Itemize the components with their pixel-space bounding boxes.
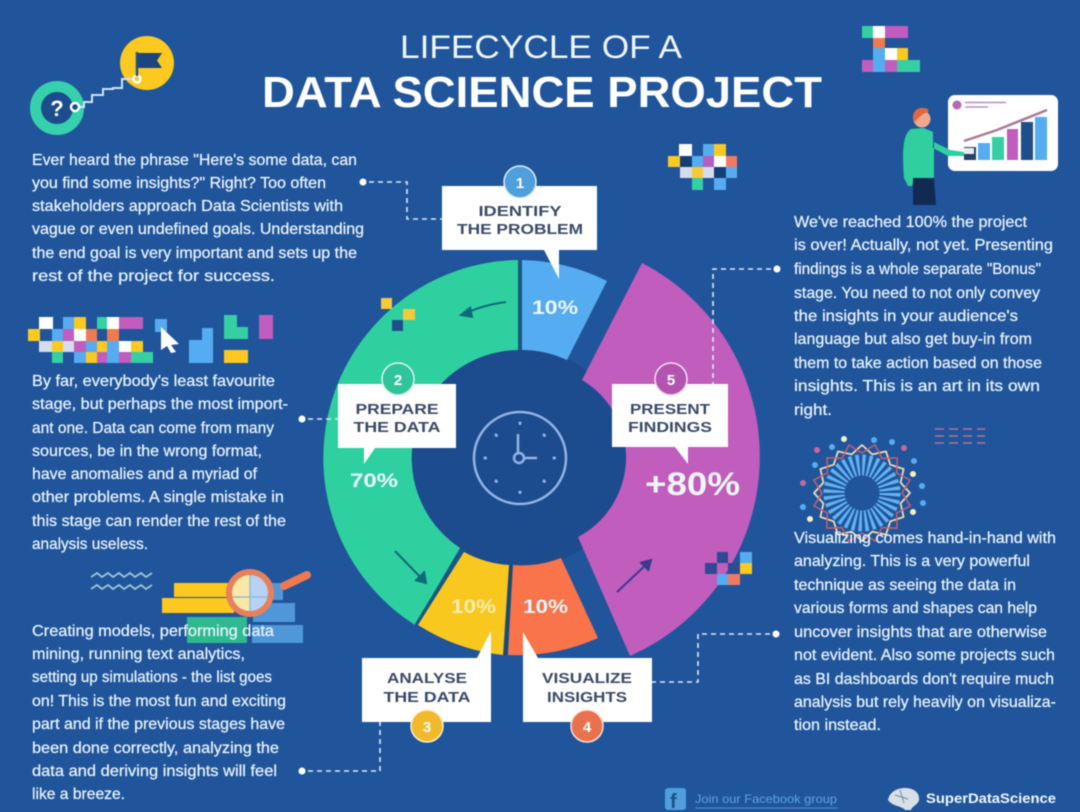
text block: prepare the data: sources, be in the wrong format,: [32, 443, 262, 460]
text block: present findings: the insights in your audience's: [794, 308, 1018, 325]
pixels on green segment: [381, 298, 415, 331]
segment: identify 10%: [522, 260, 607, 360]
text block: analyse the data: like a breeze.: [32, 786, 125, 803]
callout: present findings: FINDINGS: [628, 420, 712, 436]
icon: pixel group top centre: [668, 144, 737, 190]
text block: present findings: language but also get buy-in from: [794, 331, 1032, 348]
text block: identify the problem: rest of the project for success.: [32, 268, 275, 285]
text block: present findings: is over! Actually, not yet. Presenting: [794, 237, 1053, 254]
footer: facebook group: Join our Facebook group: [695, 792, 837, 806]
step badge 1: [504, 166, 536, 198]
callout: identify the problem: IDENTIFY: [478, 204, 562, 220]
decoration: pink dashes: [935, 429, 985, 443]
callout: analyse the data: ANALYSE: [387, 671, 467, 687]
step badge 3: 3: [423, 719, 431, 736]
text block: prepare the data: [32, 373, 288, 553]
text block: analyse the data: data and deriving insights will feel: [32, 763, 277, 780]
callout: identify the problem: [442, 166, 597, 279]
text block: analyse the data: on! This is the most fun and exciting: [32, 693, 286, 710]
callout: prepare the data: PREPARE: [356, 402, 439, 418]
icon: wavy lines: [91, 573, 152, 589]
text block: identify the problem: [32, 152, 364, 285]
segment: analyse 10%: [418, 552, 509, 655]
icon: bars with magnifier: [162, 572, 307, 643]
segment: present 80%: [578, 263, 760, 656]
step badge 2: 2: [394, 372, 402, 389]
footer: SuperDataScience logo: [888, 788, 1056, 810]
text block: identify the problem: Ever heard the phrase "Here's some data, can: [32, 152, 357, 169]
callout: analyse the data: THE DATA: [384, 690, 471, 706]
percent: 70 green: 70%: [350, 470, 398, 492]
step badge 5: 5: [667, 372, 675, 389]
arrow: blue to green: [461, 302, 506, 317]
segment: visualize 10%: [508, 558, 598, 655]
percent: 10 yellow: 10%: [451, 596, 496, 618]
text block: prepare the data: this stage can render the rest of the: [32, 513, 286, 530]
icon: radial burst: [800, 432, 926, 554]
text block: visualize insights: various forms and shapes can help: [794, 600, 1037, 617]
title: [262, 29, 822, 117]
callout: prepare the data: [338, 363, 456, 464]
text block: identify the problem: stakeholders approach Data Scientists with: [32, 198, 343, 215]
text block: identify the problem: vague or even undefined goals. Understanding: [32, 221, 364, 238]
text block: prepare the data: stage, but perhaps the most import-: [32, 396, 288, 413]
text block: visualize insights: uncover insights that are otherwise: [794, 624, 1047, 641]
centre hole: [410, 348, 630, 568]
text block: prepare the data: have anomalies and a myriad of: [32, 466, 258, 483]
text block: prepare the data: analysis useless.: [32, 536, 148, 553]
text block: present findings: We've reached 100% the project: [794, 214, 1028, 231]
donut chart: [323, 260, 760, 656]
text block: analyse the data: mining, running text analytics,: [32, 646, 245, 663]
icon: clock: [474, 412, 566, 504]
pixels on magenta segment: [705, 552, 752, 585]
connector: step 5: [713, 266, 780, 384]
text block: visualize insights: tion instead.: [794, 717, 881, 734]
text block: analyse the data: Creating models, performing data: [32, 623, 274, 640]
callout: present findings: PRESENT: [630, 402, 710, 418]
icon: pixel group top right: [862, 26, 920, 72]
text block: visualize insights: as BI dashboards don't require much: [794, 671, 1054, 688]
text block: present findings: findings is a whole separate "Bonus": [794, 261, 1041, 278]
text block: visualize insights: Visualizing comes hand-in-hand with: [794, 530, 1056, 547]
percent: 10 orange: 10%: [523, 596, 568, 618]
callout: visualize insights: INSIGHTS: [547, 690, 627, 706]
icon: presenter with chart board: [903, 95, 1058, 205]
text block: present findings: right.: [794, 402, 832, 419]
title: DATA SCIENCE PROJECT: [262, 68, 822, 117]
connector: step 1: [360, 178, 442, 219]
text block: visualize insights: technique as seeing the data in: [794, 577, 1016, 594]
title: LIFECYCLE OF A: [400, 29, 683, 65]
callout: visualize insights: [523, 632, 652, 742]
step badge 4: 4: [583, 719, 592, 736]
icon: pixel row and cursor: [28, 315, 273, 363]
callout: identify the problem: THE PROBLEM: [457, 222, 583, 238]
text block: identify the problem: you find some insights?" Right? Too often: [32, 175, 326, 192]
text block: present findings: stage. You need to not only convey: [794, 285, 1040, 302]
text block: identify the problem: the end goal is very important and sets up the: [32, 245, 357, 262]
footer: facebook group: [665, 788, 838, 812]
text block: present findings: [794, 214, 1053, 419]
text block: analyse the data: [32, 623, 286, 803]
segment: prepare 70%: [323, 260, 518, 625]
dividers: [416, 260, 520, 625]
percent: 10 blue: 10%: [532, 297, 578, 319]
text block: prepare the data: By far, everybody's least favourite: [32, 373, 275, 390]
percent: 80 magenta: +80%: [645, 466, 740, 502]
text block: visualize insights: [794, 530, 1056, 734]
footer: SuperDataScience logo: SuperDataScience: [926, 790, 1056, 806]
text block: analyse the data: been done correctly, analyzing the: [32, 740, 279, 757]
text block: present findings: insights. This is an art in its own: [794, 378, 1040, 395]
callout: prepare the data: THE DATA: [354, 420, 441, 436]
text block: visualize insights: not evident. Also some projects such: [794, 647, 1055, 664]
callout: present findings: [612, 363, 728, 464]
arrow: green to yellow: [395, 551, 426, 583]
connector: step 3: [298, 722, 380, 774]
text block: prepare the data: other problems. A single mistake in: [32, 489, 284, 506]
callout: analyse the data: [362, 631, 491, 742]
callout: visualize insights: VISUALIZE: [542, 671, 632, 687]
text block: prepare the data: ant one. Data can come from many: [32, 420, 274, 437]
arrow: visualize to present: [617, 560, 651, 592]
text block: analyse the data: setting up simulations - the list goes: [32, 669, 272, 686]
icon: question to flag path: [36, 36, 174, 130]
text block: analyse the data: part and if the previous stages have: [32, 716, 285, 733]
step badge 1: 1: [516, 175, 524, 192]
text block: present findings: them to take action based on those: [794, 355, 1042, 372]
connector: step 2: [298, 416, 338, 422]
connector: step 4: [652, 630, 780, 682]
text block: visualize insights: analysis but rely heavily on visualiza-: [794, 694, 1056, 711]
text block: visualize insights: analyzing. This is a very powerful: [794, 553, 1030, 570]
icon: question to flag path: ?: [50, 96, 64, 121]
